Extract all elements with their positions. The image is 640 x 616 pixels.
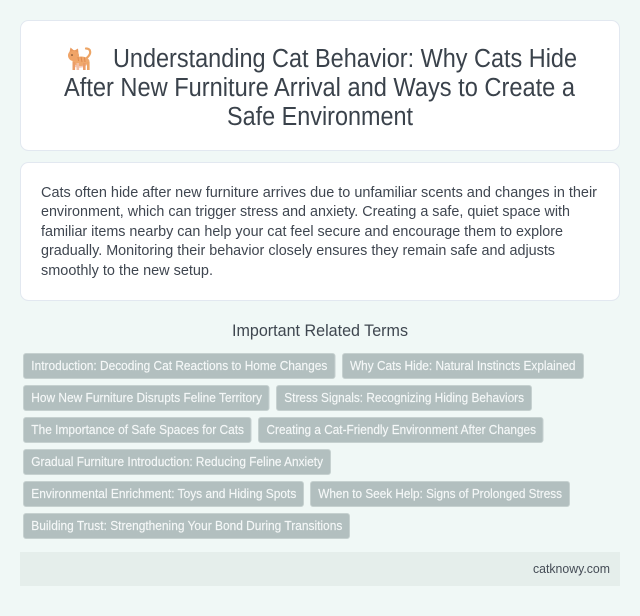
title: Understanding Cat Behavior: Why Cats Hide (113, 45, 577, 73)
text block: description (41, 184, 597, 279)
tag: furniture disrupts territory (24, 386, 269, 410)
tag: safe spaces (24, 418, 251, 442)
tag: environmental enrichment (24, 482, 304, 506)
text block: description: familiar items nearby can help your cat feel secure and encourage them to explore (41, 223, 563, 240)
tag: introduction: Introduction: Decoding Cat Reactions to Home Changes (31, 359, 327, 373)
tag: safe spaces: The Importance of Safe Spaces for Cats (31, 423, 244, 437)
tag: cat-friendly environment: Creating a Cat-Friendly Environment After Changes (266, 423, 536, 437)
tag: building trust: Building Trust: Strengthening Your Bond During Transitions (31, 519, 342, 533)
tag: when to seek help (310, 482, 570, 506)
tag: introduction (24, 354, 335, 378)
tag: stress signals: Stress Signals: Recognizing Hiding Behaviors (284, 391, 524, 405)
heading: related terms: Important Related Terms (232, 322, 408, 340)
tag: furniture disrupts territory: How New Furniture Disrupts Feline Territory (31, 391, 263, 405)
tag list (24, 354, 584, 538)
title: After New Furniture Arrival and Ways to Create a (64, 74, 576, 102)
tag: gradual introduction: Gradual Furniture Introduction: Reducing Feline Anxiety (31, 455, 324, 469)
text block: description: Cats often hide after new furniture arrives due to unfamiliar scents and changes in their (41, 184, 597, 201)
tag: why cats hide (342, 354, 584, 378)
title (64, 45, 577, 131)
tag: when to seek help: When to Seek Help: Signs of Prolonged Stress (318, 487, 562, 501)
tag: environmental enrichment: Environmental Enrichment: Toys and Hiding Spots (31, 487, 296, 501)
tag: gradual introduction (24, 450, 330, 474)
tag: cat-friendly environment (258, 418, 543, 442)
tag: why cats hide: Why Cats Hide: Natural Instincts Explained (350, 359, 576, 373)
icon: cat (68, 48, 90, 70)
title: Safe Environment (227, 103, 413, 131)
tag: stress signals (276, 386, 532, 410)
text block: description: gradually. Monitoring their behavior closely ensures they remain safe and adjusts (41, 242, 555, 259)
text block: description: smoothly to the new setup. (41, 262, 213, 279)
panel: title card (20, 20, 620, 150)
panel: description card (20, 162, 620, 300)
footer text: site name: catknowy.com (533, 561, 610, 576)
tag: building trust (24, 514, 350, 538)
footer bar (20, 552, 620, 586)
text block: description: environment, which can trigger stress and anxiety. Creating a safe, quiet space with (41, 203, 570, 220)
